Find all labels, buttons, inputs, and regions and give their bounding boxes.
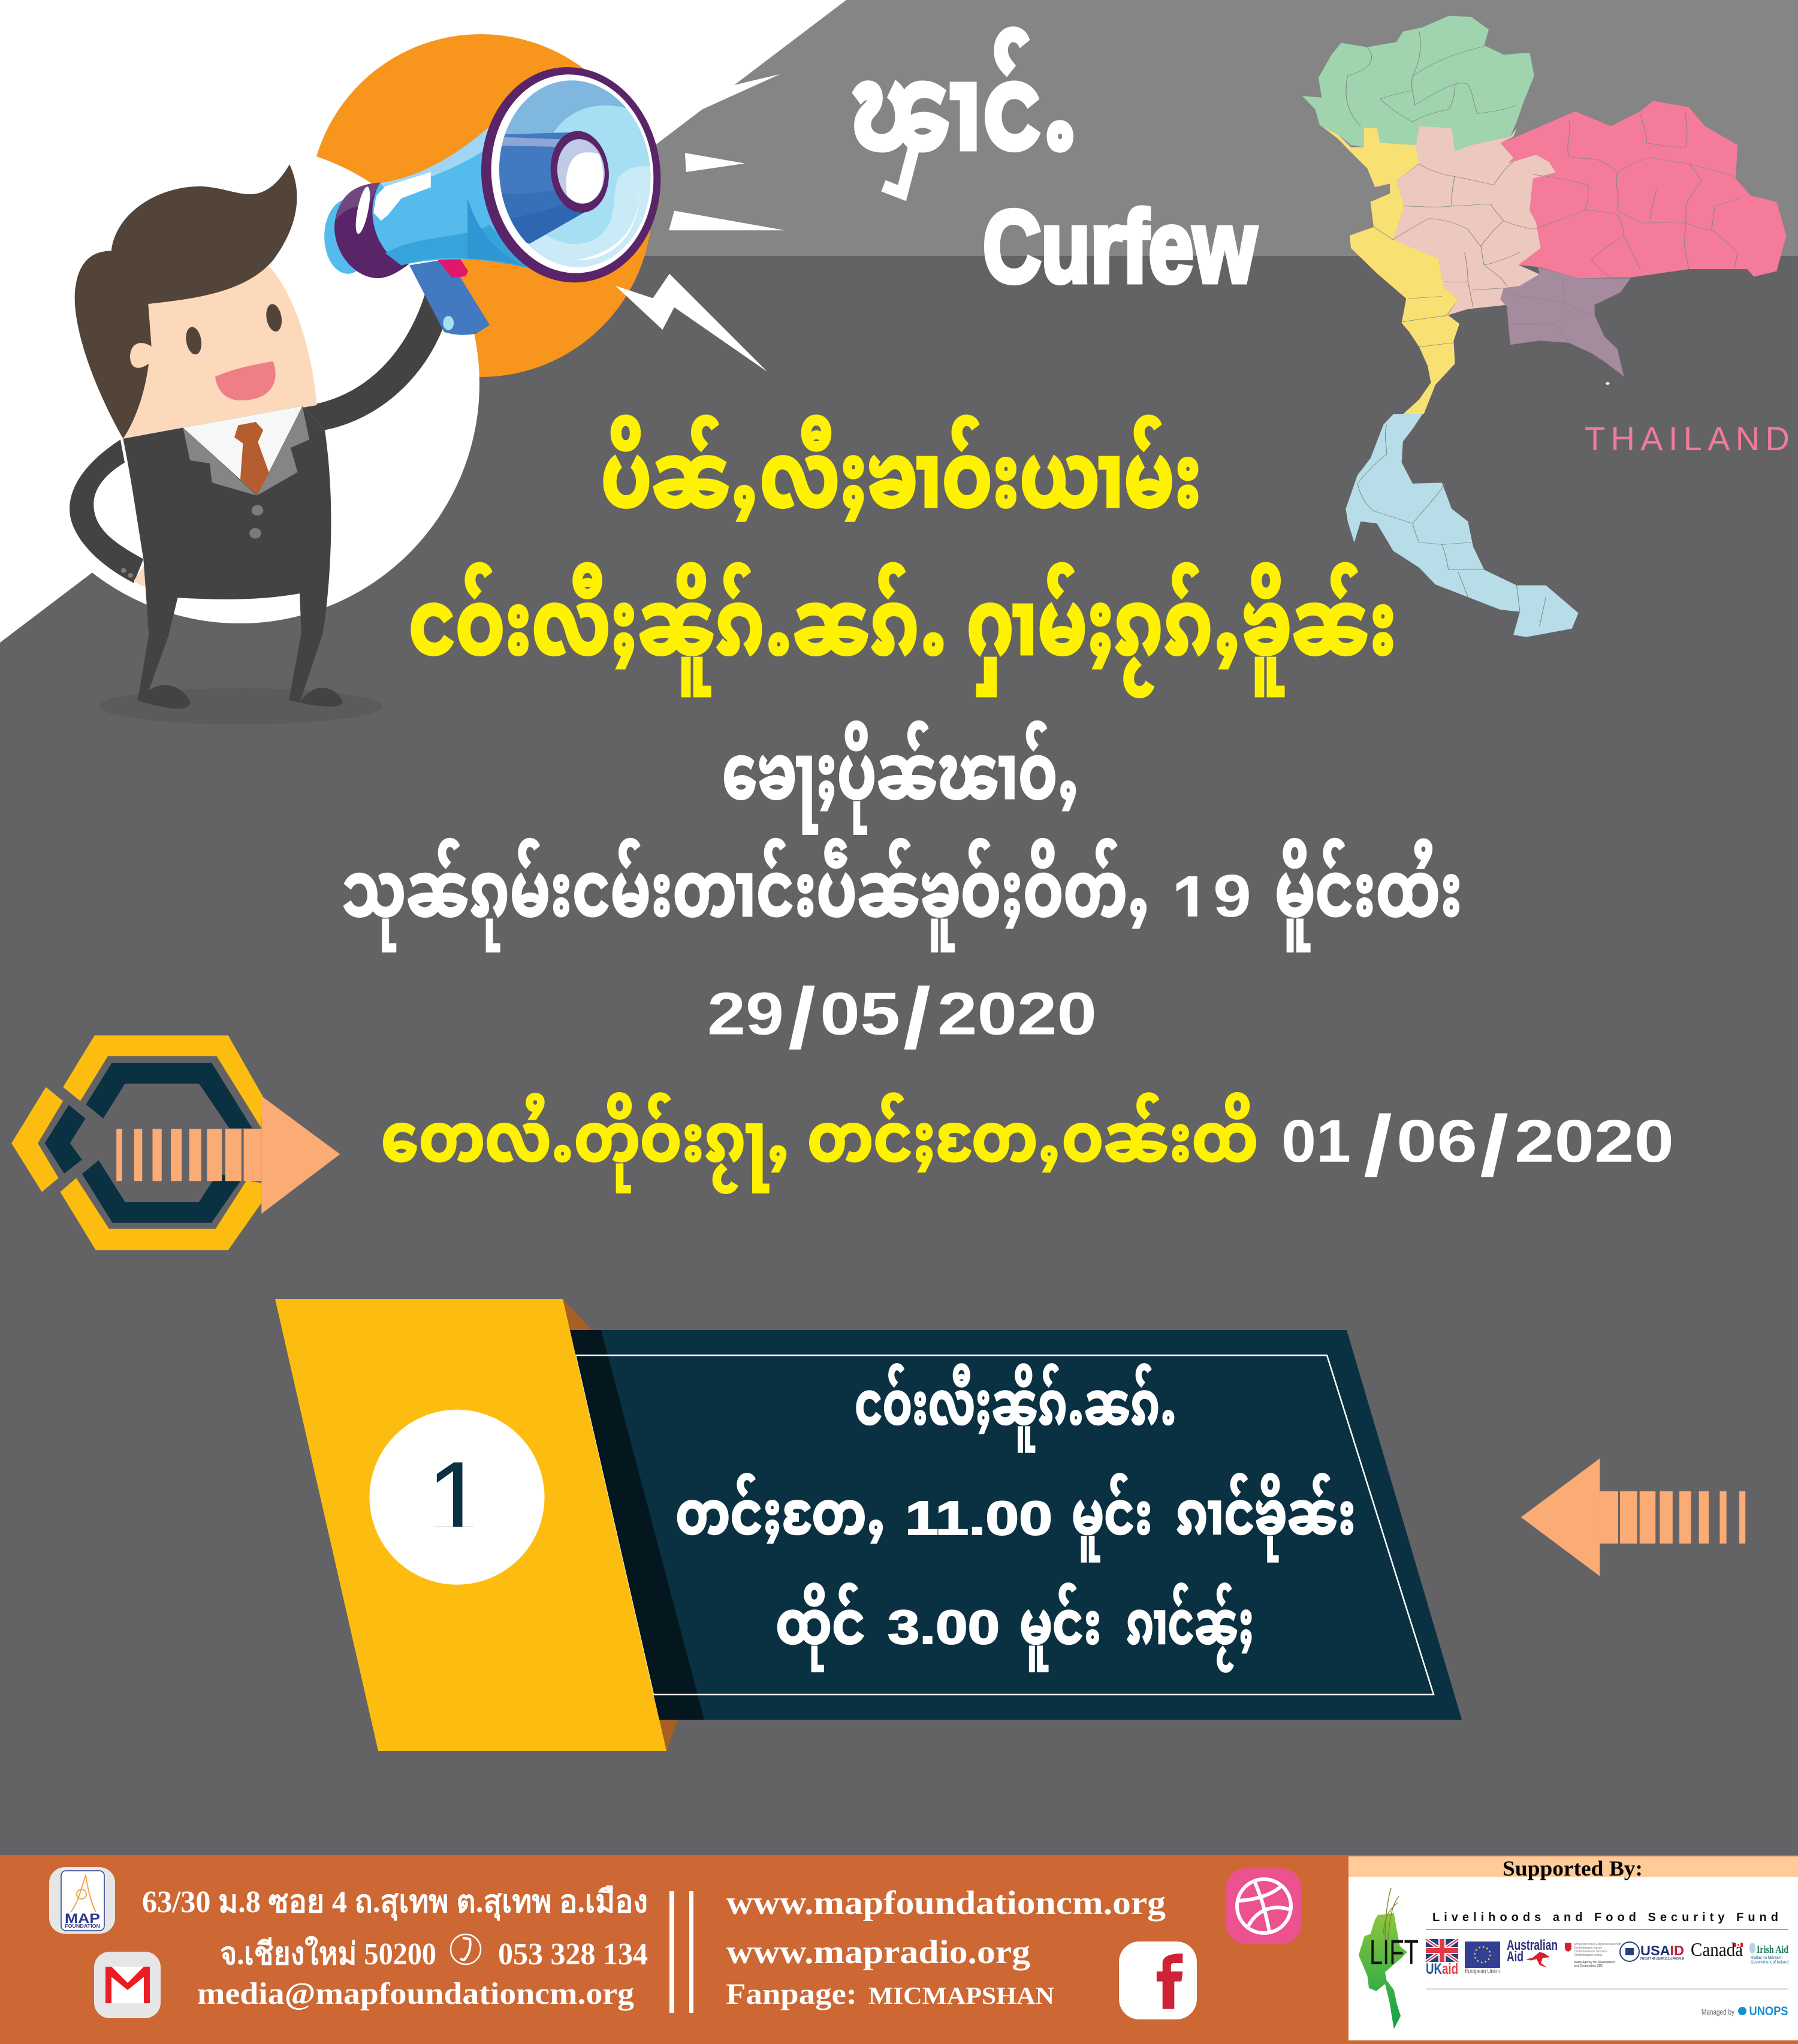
text: effective date number: / xyxy=(1363,1099,1392,1194)
text: websites xyxy=(726,1885,1166,2010)
text: fund name: Livelihoods and Food Security Fund xyxy=(1432,1911,1778,1924)
text: websites: www.mapradio.org xyxy=(726,1934,1030,1971)
logo: European Union: European Union xyxy=(1465,1968,1500,1975)
logo: Irish Aid: Rialtas na hÉireann xyxy=(1751,1955,1782,1960)
logo: Swiss Agency: Confederaziun svizra xyxy=(1574,1953,1602,1957)
white circle behind character xyxy=(0,144,479,623)
icon: dribbble xyxy=(1226,1868,1301,1944)
logo: Swiss Agency: Schweizerische Eidgenossenschaft xyxy=(1574,1943,1621,1946)
icon: telephone xyxy=(451,1934,481,1964)
logo: Irish Aid: Irish Aid xyxy=(1757,1943,1788,1955)
logo: Australian Aid: Aid xyxy=(1507,1949,1524,1965)
number badge xyxy=(369,1410,544,1585)
text: websites: MICMAPSHAN xyxy=(868,1982,1054,2009)
icon: hexagon with right arrow xyxy=(11,1035,340,1250)
logo: USAID xyxy=(1620,1942,1684,1961)
text: date: 29 xyxy=(707,981,784,1048)
logo: UNOPS: UNOPS xyxy=(1749,2004,1788,2018)
text: date: 05 xyxy=(820,981,900,1048)
text: start time: ၵၢင်ၶိုၼ်း xyxy=(1176,1473,1356,1562)
logo: Swiss Agency: and Cooperation SDC xyxy=(1574,1964,1603,1968)
text: date: 2020 xyxy=(937,981,1097,1048)
text: end time xyxy=(776,1582,1254,1672)
text: end time: မူင်း xyxy=(1019,1582,1102,1672)
icon: businessman character xyxy=(70,164,444,725)
speech burst lines xyxy=(616,74,785,372)
text: announcement line 2: 9 xyxy=(1213,863,1251,930)
logo: UK aid: UKaid xyxy=(1426,1961,1458,1977)
logo: USAID: USAID xyxy=(1640,1943,1684,1958)
text: address: จ.เชียงใหม่ 50200 xyxy=(220,1936,436,1971)
text: effective date number: 06 xyxy=(1396,1108,1477,1175)
text: start time: မူင်း xyxy=(1072,1473,1153,1562)
logo: UNOPS xyxy=(1702,2004,1788,2018)
text: date: / xyxy=(788,971,816,1066)
icon: MAP Foundation logo xyxy=(49,1867,115,1934)
logo: UK aid xyxy=(1426,1939,1458,1977)
logo: Irish Aid: Government of Ireland xyxy=(1751,1959,1788,1965)
logo: USAID: FROM THE AMERICAN PEOPLE xyxy=(1640,1957,1684,1961)
heading: curfew in Shan xyxy=(851,28,1078,193)
text: start time: တင်ႈတႄႇ xyxy=(675,1473,886,1547)
logo: European Union xyxy=(1465,1942,1500,1975)
text: panel heading: ငဝ်းလီႈၼိူၵ်ႉၼၵ်ႉ xyxy=(855,1363,1176,1452)
text: effective date number: 2020 xyxy=(1515,1108,1674,1175)
text: websites: Fanpage: xyxy=(726,1977,857,2010)
icon: facebook xyxy=(1119,1942,1197,2019)
icon: megaphone xyxy=(324,58,671,335)
text: effective date number: / xyxy=(1480,1099,1509,1194)
footer band xyxy=(0,1855,1798,2044)
text: date: / xyxy=(903,971,931,1066)
text: announcement line 2: သုၼ်ၵုမ်းငမ်းတၢင်းပဵၼ်ၶူဝ်ႈဝိတ်ႇ xyxy=(342,839,1151,951)
text: date xyxy=(707,971,1097,1066)
map of Thailand xyxy=(1302,16,1787,637)
text: end time: ၵၢင်ၼႂ်ႈ xyxy=(1126,1582,1254,1672)
text: address: 053 328 134 xyxy=(498,1937,648,1971)
logo: Australian Aid: Australian xyxy=(1507,1937,1558,1953)
heading: Curfew: Curfew xyxy=(983,190,1257,304)
heading: curfew in Shan: ၽၢင်ႉ xyxy=(851,28,1078,175)
text: effective date: တေလႆႉတိုဝ်းၵႂႃႇ တင်ႈတႄႇဝၼ်းထိ xyxy=(381,1093,1258,1193)
text: announcement line 1: ၶေႃႈပိုၼ်ၽၢဝ်ႇ xyxy=(722,721,1080,834)
text: announcement line 2: 1 xyxy=(1172,862,1210,939)
text: end time: ထိုင် xyxy=(776,1582,865,1672)
orange circle behind megaphone xyxy=(309,34,652,377)
text: address: 63/30 ม.8 ซอย 4 ถ.สุเทพ ต.สุเทพ อ.เมือง xyxy=(142,1885,648,1921)
number badge: 1 xyxy=(427,1440,485,1557)
logo: Swiss Agency: Confédération suisse xyxy=(1574,1946,1602,1950)
logo: Swiss Agency: Swiss Agency for Development xyxy=(1574,1961,1616,1964)
icon: MAP Foundation logo: FOUNDATION xyxy=(65,1924,100,1929)
label: THAILAND: THAILAND xyxy=(1585,420,1790,457)
text: start time xyxy=(675,1473,1356,1562)
title line 1: ပိၼ်ႇလီႈၶၢဝ်းယၢမ်း xyxy=(601,415,1202,526)
logo: UNOPS: Managed by xyxy=(1702,2007,1734,2016)
logo: Irish Aid xyxy=(1749,1943,1788,1965)
text: effective date number xyxy=(1281,1099,1674,1194)
logo: Australian Aid xyxy=(1507,1937,1558,1968)
icon: gmail xyxy=(94,1952,161,2018)
text: websites: www.mapfoundationcm.org xyxy=(726,1885,1166,1922)
text: end time: 3.00 xyxy=(888,1600,1000,1654)
logo: Swiss Agency: Confederazione Svizzera xyxy=(1574,1950,1607,1953)
heading: Supported By: Supported By: xyxy=(1503,1856,1643,1880)
text: start time: 11.00 xyxy=(905,1491,1052,1545)
icon: left arrow xyxy=(1521,1458,1745,1576)
logo: LIFT xyxy=(1359,1888,1419,2029)
panel: curfew hours xyxy=(275,1299,1462,1751)
text: announcement line 2: မိူင်းထႆး xyxy=(1275,839,1462,951)
logo: Canada: Canada xyxy=(1691,1939,1743,1960)
icon: MAP Foundation logo: MAP xyxy=(65,1911,100,1926)
panel: supporters xyxy=(1349,1856,1798,2040)
title line 2: ငဝ်းလီႈၼိူၵ်ႉၼၵ်ႉ ႁၢမ်ႈၵႂၵ်ႇၶိူၼ်း xyxy=(409,562,1396,697)
text: address: media@mapfoundationcm.org xyxy=(197,1977,634,2011)
logo: LIFT: LIFT xyxy=(1369,1933,1419,1972)
divider bars xyxy=(669,1891,693,2013)
text: address xyxy=(142,1885,648,2011)
logo: Swiss Agency xyxy=(1565,1943,1621,1968)
text: effective date number: 01 xyxy=(1281,1108,1351,1175)
